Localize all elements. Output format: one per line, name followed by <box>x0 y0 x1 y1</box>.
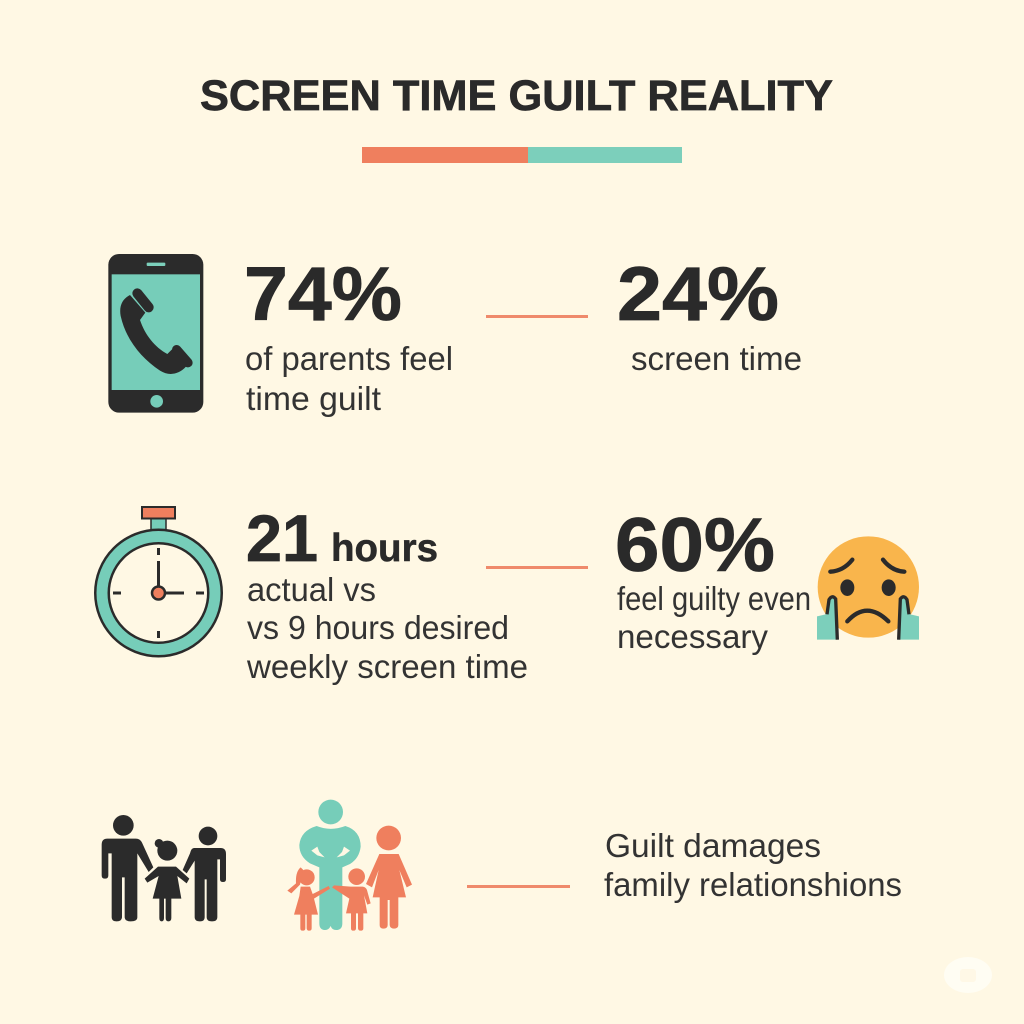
stat: 21 hours: actual vs <box>247 571 376 608</box>
icon: smartphone with handset <box>108 254 203 413</box>
stat: 74% of parents: time guilt <box>246 380 381 417</box>
stat: 21 hours <box>246 501 528 685</box>
text: guilt damages family relationships: family relationshions <box>604 866 902 903</box>
title: SCREEN TIME GUILT REALITY <box>200 72 833 120</box>
stat: 74% of parents <box>244 252 453 417</box>
stat: 21 hours: hours <box>331 527 438 570</box>
stat: 60% feel guilty: feel guilty even <box>617 580 811 617</box>
connector line row 1 <box>486 315 588 318</box>
stat: 21 hours: vs 9 hours desired <box>247 609 509 646</box>
icon: stopwatch <box>102 507 215 650</box>
connector line row 2 <box>486 566 588 569</box>
stat: 24% screen time <box>617 252 802 377</box>
stat: 21 hours: 21 <box>246 501 318 575</box>
watermark badge <box>944 957 992 993</box>
stat: 60% feel guilty: necessary <box>617 618 768 655</box>
connector line row 3 <box>467 885 570 888</box>
stat: 24% screen time: 24% <box>617 252 779 337</box>
stat: 21 hours: weekly screen time <box>246 648 528 685</box>
icon: worried face with hands <box>817 536 919 640</box>
icon: coloured family <box>287 800 412 931</box>
icon: black family silhouette <box>102 815 226 921</box>
stat: 74% of parents: 74% <box>244 252 402 337</box>
stat: 60% feel guilty <box>615 503 811 655</box>
text: guilt damages family relationships: Guilt damages <box>605 827 821 864</box>
stat: 24% screen time: screen time <box>631 340 802 377</box>
title accent bar <box>362 147 682 163</box>
text: guilt damages family relationships <box>604 827 902 903</box>
stat: 74% of parents: of parents feel <box>245 340 453 377</box>
stat: 60% feel guilty: 60% <box>615 503 775 588</box>
